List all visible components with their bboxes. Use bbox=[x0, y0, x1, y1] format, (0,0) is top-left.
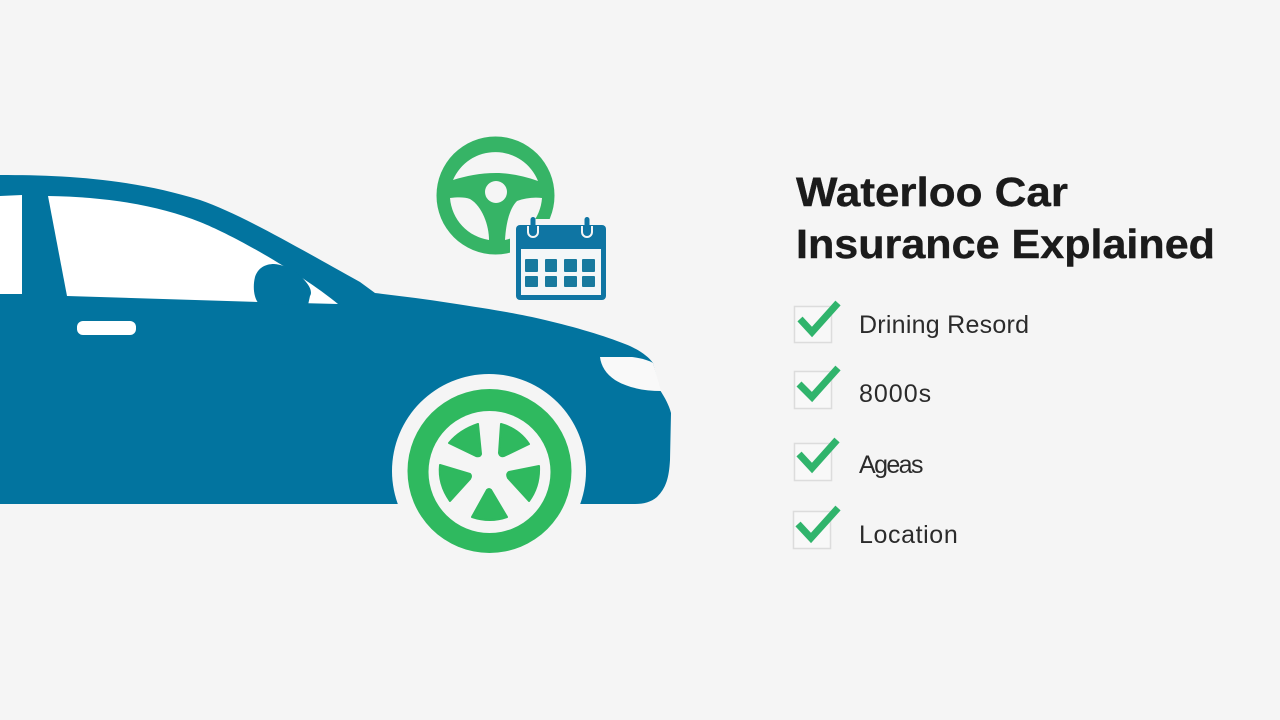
item: 8000s: 8000s bbox=[859, 380, 932, 408]
item: ages: Ageas bbox=[859, 451, 923, 479]
headlight bbox=[600, 357, 661, 391]
checklist bbox=[794, 303, 1029, 549]
item: ages bbox=[794, 440, 923, 480]
title: Insurance Explained bbox=[796, 221, 1215, 267]
title bbox=[796, 169, 1215, 267]
rear window bbox=[0, 195, 22, 294]
icon: calendar bbox=[510, 217, 612, 306]
item: 8000s bbox=[794, 368, 932, 408]
front window bbox=[48, 196, 338, 304]
item: driving record: Drining Resord bbox=[859, 311, 1029, 339]
door handle bbox=[77, 321, 136, 335]
icon: steering wheel bbox=[436, 136, 554, 254]
item: location bbox=[794, 508, 958, 549]
wheel bbox=[380, 374, 600, 575]
item: driving record bbox=[794, 303, 1029, 342]
illustration: car side view bbox=[0, 175, 671, 575]
item: location: Location bbox=[859, 521, 958, 549]
car body bbox=[0, 175, 671, 504]
title: Waterloo Car bbox=[796, 169, 1068, 215]
side mirror bbox=[254, 264, 311, 305]
